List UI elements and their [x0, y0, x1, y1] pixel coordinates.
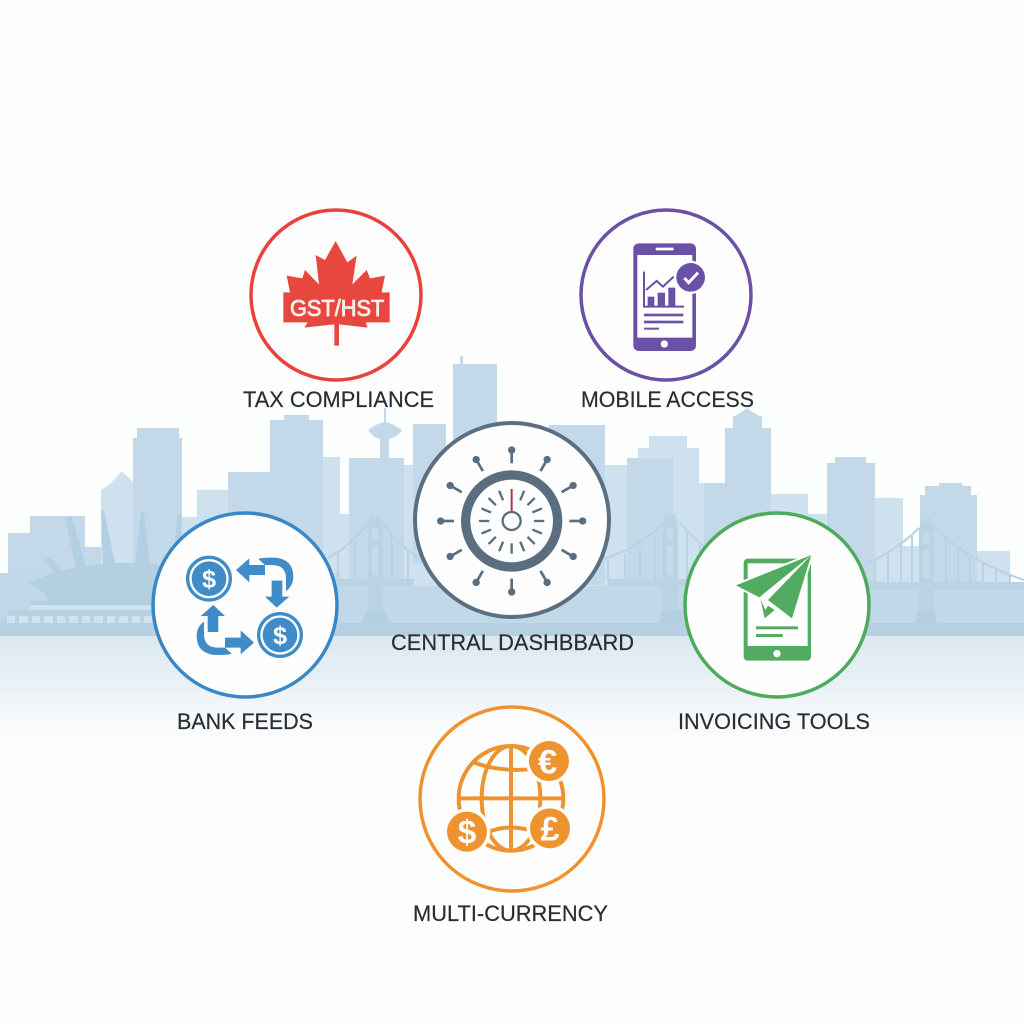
foreground fade: [0, 636, 1024, 748]
node: mobile access: [581, 210, 754, 412]
stadium: [28, 510, 201, 605]
node: multi-currency: [413, 707, 608, 926]
circle: central dashboard: [415, 423, 609, 617]
label: tax compliance: TAX COMPLIANCE: [243, 387, 434, 412]
water and quay: [0, 573, 1024, 636]
light buildings: [101, 436, 1010, 587]
circle: multi-currency: [420, 707, 604, 891]
icon: globe with currency coins: €: [538, 743, 557, 781]
node: bank feeds: [153, 513, 337, 734]
suspension bridge: [328, 513, 1024, 623]
node: invoicing tools: [678, 513, 870, 734]
label: central dashboard: CENTRAL DASHBBARD: [391, 630, 634, 655]
icon: globe with currency coins: £: [541, 811, 560, 849]
icon: maple leaf with GST/HST band: [283, 241, 390, 346]
circle: mobile access: [581, 210, 751, 380]
icon: maple leaf with GST/HST band: GST/HST: [290, 295, 384, 321]
label: multi-currency: MULTI-CURRENCY: [413, 901, 608, 926]
icon: globe with currency coins: [444, 738, 573, 855]
icon: tablet and paper plane: [736, 555, 811, 661]
label: bank feeds: BANK FEEDS: [177, 709, 313, 734]
icon: coins and exchange arrows: $: [202, 566, 216, 594]
circle: bank feeds: [153, 513, 337, 697]
label: invoicing tools: INVOICING TOOLS: [678, 709, 870, 734]
circle: tax compliance: [251, 210, 421, 380]
node: tax compliance: [243, 210, 434, 412]
icon: phone with chart and check: [633, 243, 707, 351]
icon: coins and exchange arrows: $: [273, 622, 287, 650]
icon: coins and exchange arrows: [188, 557, 301, 656]
node: central dashboard: [391, 423, 634, 655]
icon: globe with currency coins: $: [458, 815, 477, 852]
pier: [0, 605, 170, 623]
main buildings: [8, 356, 977, 586]
circle: invoicing tools: [685, 513, 869, 697]
skyline backdrop: [0, 356, 1024, 748]
icon: dial: [438, 448, 585, 594]
label: mobile access: MOBILE ACCESS: [581, 387, 754, 412]
harbour tower: [368, 408, 402, 458]
